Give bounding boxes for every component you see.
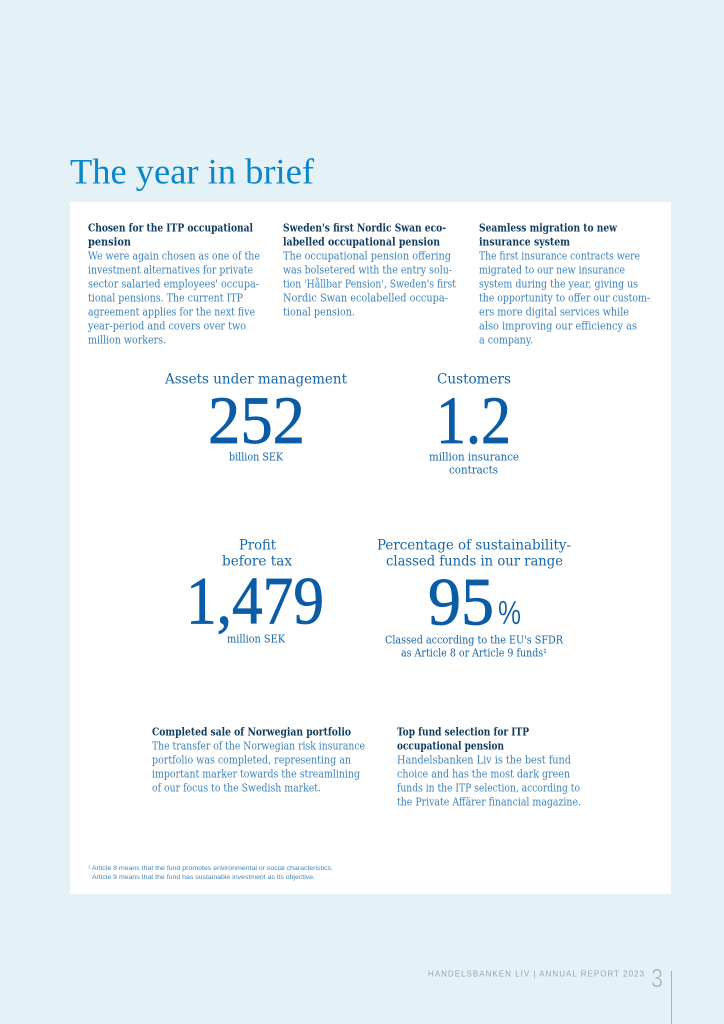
text block: Norwegian portfolio <box>152 725 365 794</box>
text block: Nordic Swan: Nordic Swan ecolabelled occupa- <box>283 291 448 304</box>
stat: sustainability-classed funds: Percentage of sustainability- <box>377 537 571 553</box>
text block: chosen for ITP: We were again chosen as one of the <box>88 249 260 262</box>
text block: chosen for ITP: year-period and covers over two <box>87 319 246 332</box>
stat: sustainability-classed funds: 95 <box>428 564 494 640</box>
stat: sustainability-classed funds: Classed according to the EU's SFDR <box>385 633 564 646</box>
page footer: 3 <box>651 963 663 993</box>
text block: seamless migration: Seamless migration to new <box>479 221 618 234</box>
footnote: ¹ Article 8 means that the fund promotes environmental or social characteristics. <box>88 866 333 872</box>
stat: assets under management: Assets under management <box>164 371 347 387</box>
text block: chosen for ITP: tional pensions. The current ITP <box>88 291 243 304</box>
stat: customers: 1.2 <box>436 382 511 458</box>
text block: Nordic Swan: tional pension. <box>283 305 355 318</box>
stat: profit before tax <box>186 537 324 645</box>
text block: chosen for ITP: agreement applies for the next five <box>88 305 255 318</box>
text block: top fund selection: funds in the ITP selection, according to <box>397 781 580 794</box>
text block: chosen for ITP: million workers. <box>88 333 166 346</box>
stat: profit before tax: 1,479 <box>186 562 324 638</box>
stat: profit before tax: Profit <box>239 537 276 553</box>
text block: chosen for ITP: Chosen for the ITP occupational <box>88 221 253 234</box>
text block: chosen for ITP <box>87 221 260 346</box>
text block: seamless migration: a company. <box>479 333 533 346</box>
text block: Norwegian portfolio: of our focus to the Swedish market. <box>152 781 321 794</box>
footnote <box>88 866 333 881</box>
stat: sustainability-classed funds: % <box>498 594 521 631</box>
text block: Norwegian portfolio: Completed sale of Norwegian portfolio <box>152 725 351 738</box>
text block: Nordic Swan: The occupational pension offering <box>283 249 451 262</box>
footnote: Article 9 means that the fund has sustainable investment as its objective. <box>92 875 315 881</box>
stat: profit before tax: before tax <box>222 553 292 569</box>
stat: assets under management: 252 <box>208 382 305 458</box>
text block: seamless migration: the opportunity to offer our custom- <box>479 291 650 304</box>
text block: chosen for ITP: investment alternatives for private <box>88 263 253 276</box>
stat: assets under management: billion SEK <box>229 450 284 463</box>
text block: top fund selection: Handelsbanken Liv is the best fund <box>397 753 571 766</box>
text block: Norwegian portfolio: portfolio was completed, representing an <box>152 753 351 766</box>
text block: seamless migration: ers more digital services while <box>479 305 629 318</box>
text block: top fund selection: choice and has the most dark green <box>397 767 570 780</box>
stat: sustainability-classed funds <box>377 537 571 659</box>
stat: sustainability-classed funds: as Article 8 or Article 9 funds¹ <box>401 646 547 659</box>
stat: customers: Customers <box>437 371 511 387</box>
text block: seamless migration <box>479 221 650 346</box>
text block: top fund selection: Top fund selection for ITP <box>397 725 529 738</box>
stat: assets under management <box>164 371 347 463</box>
stat: sustainability-classed funds: classed funds in our range <box>386 553 563 569</box>
text block: Norwegian portfolio: important marker towards the streamlining <box>152 767 360 780</box>
text block: Nordic Swan: tion 'Hållbar Pension', Sweden's first <box>283 277 457 290</box>
text block: seamless migration: system during the year, giving us <box>479 277 638 290</box>
text block: top fund selection: occupational pension <box>397 739 504 752</box>
text block: Nordic Swan <box>283 221 457 318</box>
stat: profit before tax: million SEK <box>227 632 286 645</box>
text block: top fund selection: the Private Affärer financial magazine. <box>397 795 581 808</box>
text block: seamless migration: also improving our efficiency as <box>479 319 637 332</box>
text block: Norwegian portfolio: The transfer of the Norwegian risk insurance <box>152 739 365 752</box>
text block: top fund selection <box>397 725 581 808</box>
stat: customers: contracts <box>449 463 498 476</box>
text block: Nordic Swan: Sweden's first Nordic Swan eco- <box>283 221 446 234</box>
text block: chosen for ITP: sector salaried employees' occupa- <box>88 277 259 290</box>
page footer <box>428 963 672 1024</box>
stat: customers: million insurance <box>429 450 519 463</box>
text block: Nordic Swan: was bolsetered with the entry solu- <box>283 263 452 276</box>
text block: seamless migration: migrated to our new insurance <box>479 263 625 276</box>
text block: chosen for ITP: pension <box>88 235 131 248</box>
panel: white content panel <box>70 202 671 894</box>
stat: customers <box>429 371 519 476</box>
page footer: HANDELSBANKEN LIV | ANNUAL REPORT 2023 <box>428 970 645 978</box>
text block: seamless migration: insurance system <box>479 235 571 248</box>
text block: seamless migration: The first insurance contracts were <box>479 249 640 262</box>
title: The year in brief <box>70 152 314 192</box>
text block: Nordic Swan: labelled occupational pension <box>283 235 440 248</box>
